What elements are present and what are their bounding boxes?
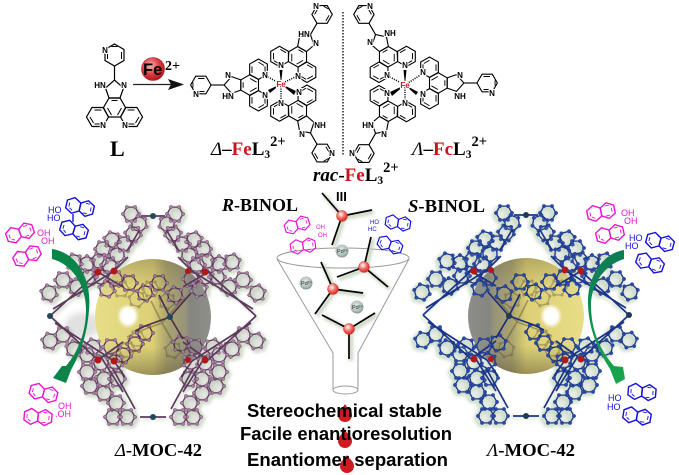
molecule: delta FeL3 complex [191, 0, 350, 175]
divider: mirror plane [342, 12, 344, 155]
label: S-BINOL: S-BINOL [408, 196, 485, 216]
molecule: ligand L: N [102, 46, 108, 55]
molecule: lambda FeL3 complex: NH [384, 29, 396, 38]
icon: magenta BINOL bottom left [24, 382, 72, 426]
icon: magenta BINOL bottom left: .OH [55, 409, 71, 419]
molecule: ligand L: N [122, 121, 128, 130]
icon: blue BINOL bottom right [607, 383, 656, 426]
icon: blue BINOL right: HO [629, 233, 642, 243]
molecule: lambda FeL3 complex: N [420, 90, 426, 99]
molecule: delta FeL3 complex: N [313, 39, 319, 48]
molecule: delta FeL3 complex: N [262, 71, 268, 80]
label: delta FeL3 2+: 2+ [270, 134, 286, 150]
molecule: ligand L [86, 44, 142, 130]
icon: III ligand mark: III [336, 189, 347, 204]
icon: magenta BINOL bottom left: OH [58, 401, 72, 411]
molecule: delta FeL3 complex: N [329, 149, 335, 158]
molecule: delta FeL3 complex: N [225, 71, 231, 80]
icon: blue BINOL funnel: HC [368, 227, 377, 233]
icon: magenta BINOL top right: OH [624, 216, 638, 226]
icon: magenta BINOL funnel: OH [318, 233, 327, 239]
molecule: lambda FeL3 complex: N [457, 71, 463, 80]
molecule: delta FeL3 complex: HN [298, 30, 310, 39]
icon: Fe2+ ball [142, 58, 180, 80]
molecule: lambda FeL3 complex: HN [362, 121, 374, 130]
molecule: delta FeL3 complex: N [278, 61, 284, 70]
icon: magenta BINOL top left [4, 221, 55, 269]
molecule: lambda FeL3 complex: N [381, 130, 387, 139]
text: facile enantioresolution: Facile enantioresolution [240, 424, 452, 444]
icon: blue BINOL top left: HO [47, 213, 60, 223]
label: lambda FeL3 2+: 3 [466, 149, 472, 161]
label: rac-FeL3 2+: rac-FeL [313, 165, 377, 186]
molecule: lambda FeL3 complex [336, 0, 497, 175]
cage: delta MOC-42 [37, 205, 271, 428]
molecule: lambda FeL3 complex: NH [454, 92, 466, 101]
molecule: lambda FeL3 complex: N [402, 99, 408, 108]
cage: lambda MOC-42 [408, 204, 642, 427]
label: rac-FeL3 2+: 2+ [383, 160, 399, 176]
molecule: delta FeL3 complex: N [193, 90, 199, 99]
molecule: lambda FeL3 complex: N [367, 2, 373, 11]
label: delta FeL3 2+: 3 [264, 149, 270, 161]
icon: Pd ions: Pd²⁺ [352, 304, 364, 311]
nodes: dark and star metal centres [470, 212, 632, 419]
icon: red drops [338, 404, 354, 473]
arrow: left green curve [52, 249, 89, 383]
arrow: reaction [133, 79, 184, 90]
label: R-BINOL: R-BINOL [221, 195, 298, 215]
molecule: delta FeL3 complex: N [278, 99, 284, 108]
label: rac-FeL3 2+: 3 [377, 175, 383, 187]
molecule: lambda FeL3 complex: N [420, 68, 426, 77]
molecule: lambda FeL3 complex: N [384, 89, 390, 98]
label: L: L [110, 136, 125, 161]
icon: tritopic ligands [315, 193, 390, 361]
molecule: lambda FeL3 complex: Fe [400, 81, 410, 90]
icon: blue BINOL bottom right: HO [607, 402, 620, 412]
icon: blue BINOL right: HO [625, 241, 638, 251]
molecule: delta FeL3 complex: Fe [276, 80, 286, 89]
icon: Fe2+ ball: 2+ [165, 59, 180, 74]
molecule: lambda FeL3 complex: N [384, 71, 390, 80]
icon: Pd ions: Pd²⁺ [301, 280, 313, 287]
molecule: lambda FeL3 complex: N [349, 149, 355, 158]
icon: magenta BINOL top right: OH [621, 208, 634, 218]
icon: magenta BINOL funnel [283, 214, 327, 255]
label: delta-MOC-42: Δ-MOC-42 [114, 440, 202, 460]
label: delta FeL3 2+: Δ–FeL [211, 139, 264, 160]
icon: funnel [277, 248, 409, 394]
molecule: delta FeL3 complex: N [313, 2, 319, 11]
icon: blue BINOL bottom right: HO [608, 393, 622, 403]
icon: Fe2+ ball: Fe [143, 61, 162, 79]
molecule: lambda FeL3 complex: N [367, 38, 373, 47]
text: enantiomer separation: Enantiomer separation [247, 450, 448, 470]
label: lambda-MOC-42: Λ-MOC-42 [485, 440, 575, 460]
icon: magenta BINOL top left: OH [37, 228, 50, 238]
icon: blue BINOL funnel [368, 214, 411, 256]
icon: magenta BINOL top right [586, 201, 638, 245]
icon: magenta BINOL top left: OH [41, 236, 54, 246]
arrow: right green curve [588, 250, 625, 384]
nodes: dark and star metal centres [47, 213, 208, 420]
molecule: ligand L: N [121, 81, 127, 90]
molecule: lambda FeL3 complex: N [402, 61, 408, 70]
label: lambda FeL3 2+: Λ–FcL [412, 139, 466, 160]
molecule: delta FeL3 complex: N [296, 88, 302, 97]
molecule: delta FeL3 complex: N [262, 91, 268, 100]
icon: Pd ions [300, 244, 364, 314]
icon: blue BINOL funnel: HO [370, 220, 379, 226]
icon: blue BINOL right [625, 231, 675, 275]
molecule: delta FeL3 complex: NH [314, 121, 326, 130]
molecule: ligand L: N [100, 121, 106, 130]
molecule: ligand L: HN [94, 81, 106, 90]
label: lambda FeL3 2+: 2+ [471, 134, 487, 150]
icon: blue BINOL top left [47, 196, 95, 242]
molecule: delta FeL3 complex: N [295, 72, 301, 81]
icon: magenta BINOL funnel: OH [316, 225, 325, 231]
text: stereochemical stable: Stereochemical stable [247, 401, 442, 421]
molecule: delta FeL3 complex: N [299, 130, 305, 139]
molecule: lambda FeL3 complex: N [489, 89, 495, 98]
icon: Pd ions: Pd²⁺ [337, 248, 349, 255]
icon: blue BINOL top left: HO [48, 205, 62, 215]
molecule: delta FeL3 complex: HN [222, 92, 234, 101]
